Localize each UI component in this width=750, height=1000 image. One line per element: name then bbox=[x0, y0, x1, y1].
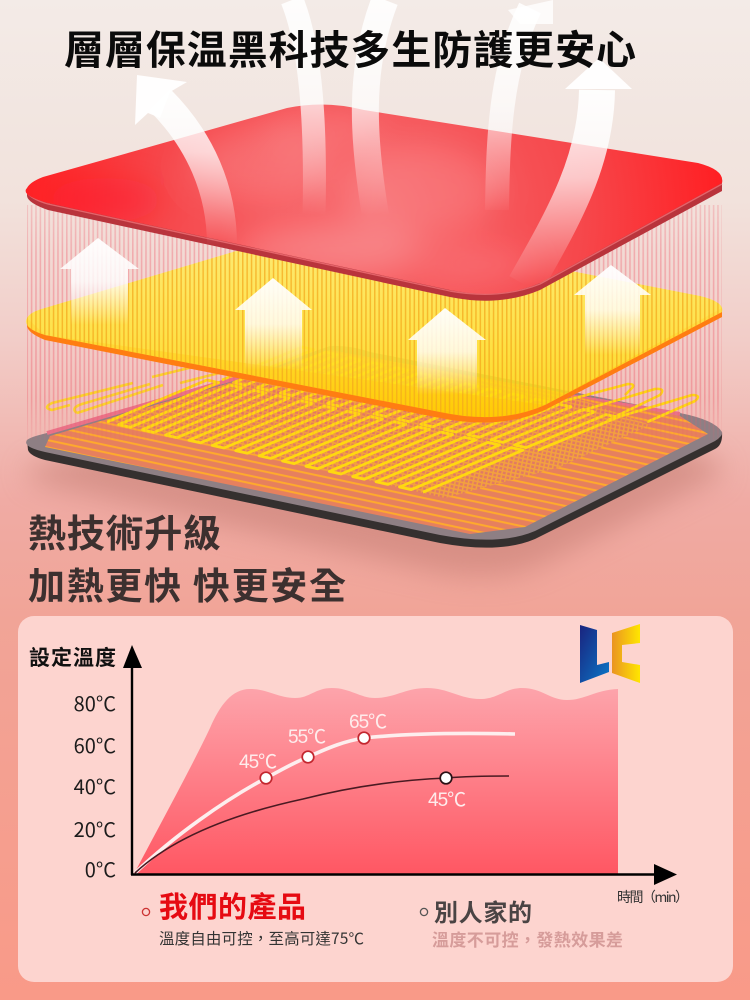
icon: curved heat arrow right bbox=[525, 58, 632, 285]
heating coil wires bbox=[47, 347, 698, 492]
x axis arrow bbox=[131, 864, 677, 885]
icon: white up arrow 4 bbox=[574, 265, 651, 355]
base heating plate bbox=[26, 346, 722, 548]
label: 55 degrees: 55℃ bbox=[288, 727, 326, 748]
heading: faster and safer: 加熱更快 快更安全 bbox=[28, 556, 346, 610]
middle insulation layer bbox=[26, 250, 722, 422]
icon: white up arrow 2 bbox=[235, 278, 312, 370]
icon: curved heat arrow centre left bbox=[292, 0, 314, 215]
icon: curved heat arrow left bbox=[135, 75, 222, 245]
legend: our product: 溫度自由可控，至高可達75℃ bbox=[159, 927, 364, 949]
icon: white up arrow 3 bbox=[408, 308, 486, 395]
data point: 55 degrees bbox=[302, 751, 314, 763]
icon: curved heat arrow centre right bbox=[497, 0, 553, 210]
top red plate bbox=[26, 104, 722, 301]
legend: competitor product bbox=[420, 893, 623, 951]
data point: 65 degrees bbox=[358, 732, 370, 744]
label: 65 degrees: 65℃ bbox=[349, 712, 387, 733]
panel: heating layers illustration bbox=[26, 0, 722, 577]
base plate shadow bbox=[26, 385, 722, 577]
our product curve bbox=[135, 733, 515, 873]
steam clouds on red plate bbox=[45, 112, 535, 281]
icon: curved heat arrow centre bbox=[365, 0, 385, 230]
y axis tick labels: 60°C bbox=[74, 730, 116, 759]
chart area fill bbox=[134, 688, 618, 874]
y axis title: 設定溫度 bbox=[29, 642, 116, 672]
competitor curve bbox=[135, 776, 509, 873]
y axis tick labels bbox=[74, 688, 116, 883]
legend: our product bbox=[142, 884, 364, 949]
data point: competitor 45 degrees bbox=[440, 772, 452, 784]
x axis title: 時間（min） bbox=[617, 887, 689, 907]
legend: competitor product: 別人家的 bbox=[434, 893, 532, 928]
label: 45 degrees: 45℃ bbox=[239, 752, 277, 773]
legend: our product: 我們的產品 bbox=[159, 884, 306, 926]
y axis tick labels: 40°C bbox=[74, 771, 116, 800]
title: 層層保温黑科技多生防護更安心 bbox=[64, 18, 636, 76]
legend: competitor product: 溫度不可控，發熱效果差 bbox=[432, 926, 623, 951]
data point: 45 degrees bbox=[260, 772, 272, 784]
vertical heat stripes bbox=[27, 205, 722, 440]
icon: LC logo bbox=[580, 624, 640, 683]
icon: white up arrow 1 bbox=[60, 238, 139, 325]
panel: temperature chart bbox=[18, 616, 733, 982]
label: competitor 45 degrees: 45℃ bbox=[428, 790, 466, 811]
y axis tick labels: 0°C bbox=[85, 854, 116, 883]
y axis arrow bbox=[123, 645, 142, 875]
y axis tick labels: 80°C bbox=[74, 688, 116, 717]
y axis tick labels: 20°C bbox=[74, 814, 116, 843]
heading: technology upgrade: 熱技術升級 bbox=[28, 503, 221, 558]
